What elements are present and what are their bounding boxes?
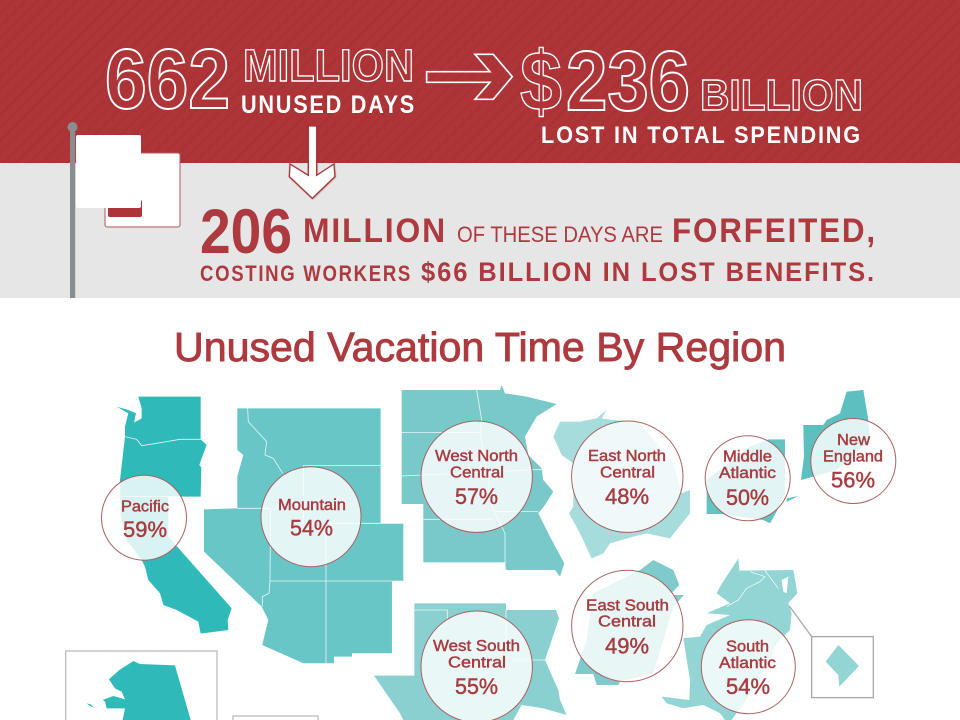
callout: New England 56%: England	[823, 449, 883, 466]
map: East North Central region shape	[553, 410, 690, 558]
callout: Mountain 54%: Mountain	[278, 497, 346, 514]
map: Washington DC inset	[789, 606, 873, 698]
callout: East South Central 49%	[572, 570, 683, 682]
callout: West South Central 55%: Central	[448, 655, 506, 672]
map: New England region shape	[801, 390, 870, 480]
stat: 662 million unused days: MILLION	[243, 40, 414, 91]
callout: East North Central 48%	[572, 421, 683, 532]
callout: Pacific 59%: Pacific	[121, 499, 169, 516]
callout: Middle Atlantic 50%: 50%	[726, 485, 769, 510]
map: West South Central region shape	[374, 603, 567, 720]
callout: Middle Atlantic 50%: Middle	[723, 449, 772, 466]
stat: 662 million unused days: 662	[105, 32, 230, 126]
callout: East North Central 48%: East North	[588, 448, 666, 465]
map: Mountain region shape	[204, 408, 403, 663]
callout: New England 56%: 56%	[831, 467, 875, 492]
map: East South Central region shape	[575, 560, 684, 685]
callout: Pacific 59%	[102, 475, 186, 560]
stat: 662 million unused days	[105, 32, 416, 126]
map: Middle Atlantic region shape	[707, 439, 798, 523]
callout: East North Central 48%: 48%	[605, 484, 649, 509]
callout: East South Central 49%: Central	[598, 614, 656, 631]
callout: South Atlantic 54%	[701, 620, 795, 714]
map: West North Central region shape	[402, 385, 564, 577]
callout: Middle Atlantic 50%: Atlantic	[719, 465, 776, 482]
callout: Mountain 54%: 54%	[290, 516, 333, 541]
map: Pacific region shape	[117, 397, 232, 634]
callout: East South Central 49%: 49%	[605, 633, 649, 658]
callout: South Atlantic 54%: 54%	[726, 674, 770, 699]
icon: flag	[68, 122, 180, 298]
callout: West South Central 55%: West South	[433, 638, 520, 655]
callout: South Atlantic 54%: South	[726, 639, 769, 656]
stat: $236 billion lost in total spending: $	[520, 34, 562, 128]
callout: New England 56%	[811, 418, 896, 504]
text: forfeited days: 206	[200, 197, 292, 267]
text: forfeited days	[200, 197, 877, 287]
callout: West South Central 55%	[421, 611, 532, 720]
map: Alaska inset	[66, 651, 217, 720]
stat: $236 billion lost in total spending: LOST IN TOTAL SPENDING	[541, 122, 862, 149]
panel: red header band	[0, 0, 960, 163]
stat: $236 billion lost in total spending	[520, 34, 863, 149]
heading: Unused Vacation Time By Region	[174, 324, 786, 370]
stat: $236 billion lost in total spending: BILLION	[700, 71, 863, 120]
callout: Middle Atlantic 50%	[705, 436, 790, 521]
callout: Mountain 54%	[261, 467, 361, 567]
callout: West North Central 57%: Central	[450, 465, 504, 482]
text: forfeited days: $66 BILLION IN LOST BENEFITS.	[421, 257, 876, 287]
callout: West South Central 55%: 55%	[455, 674, 498, 699]
callout: East North Central 48%: Central	[600, 465, 655, 482]
map: Hawaii inset frame	[233, 716, 318, 720]
panel: grey forfeited band	[0, 163, 960, 298]
callout: West North Central 57%	[421, 421, 532, 532]
text: forfeited days: FORFEITED,	[672, 212, 877, 250]
stat: 662 million unused days: UNUSED DAYS	[241, 91, 416, 119]
arrow: down	[289, 126, 335, 198]
arrow: right	[427, 54, 512, 99]
callout: South Atlantic 54%: Atlantic	[719, 655, 776, 672]
map: South Atlantic region shape	[662, 558, 797, 720]
text: forfeited days: COSTING WORKERS	[200, 261, 412, 286]
callout: West North Central 57%: 57%	[455, 484, 498, 509]
callout: Pacific 59%: 59%	[123, 517, 167, 542]
text: forfeited days: MILLION	[303, 212, 447, 250]
callout: East South Central 49%: East South	[586, 598, 669, 615]
callout: New England 56%: New	[837, 432, 870, 449]
stat: $236 billion lost in total spending: 236	[566, 34, 690, 128]
text: forfeited days: OF THESE DAYS ARE	[457, 222, 663, 247]
callout: West North Central 57%: West North	[435, 448, 518, 465]
